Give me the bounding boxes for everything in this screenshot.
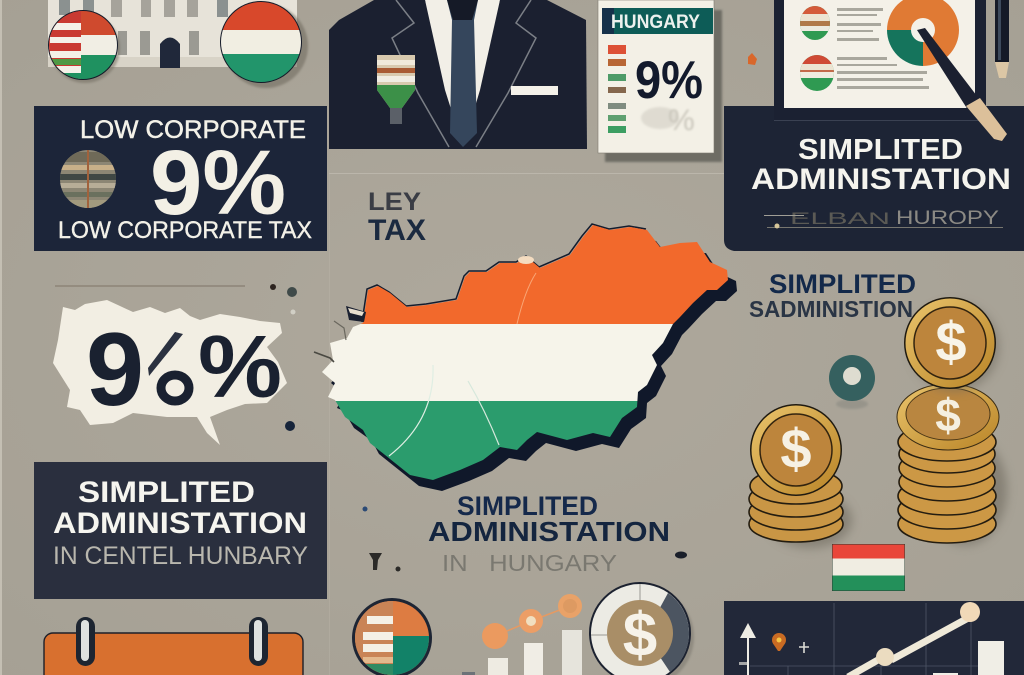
text: simplited administration in Hungary: IN HUNGARY xyxy=(442,550,617,576)
coin stack: left xyxy=(749,404,852,548)
icon: flag badge on report xyxy=(800,55,834,91)
illustration: report with donut chart and pen xyxy=(774,0,1009,141)
report text lines xyxy=(837,8,929,89)
map shadow xyxy=(331,236,737,491)
figure: percent: % xyxy=(198,317,282,416)
garbled subtitle xyxy=(764,208,1003,229)
donut chart xyxy=(887,0,959,66)
bars xyxy=(933,641,1004,675)
top coin: $ xyxy=(935,310,967,373)
label: ley tax: TAX xyxy=(368,214,426,247)
calendar ring xyxy=(76,617,95,666)
axis arrow xyxy=(739,623,756,675)
icon: striped flag badge xyxy=(48,10,120,83)
text: simplited sadministion: SIMPLITED xyxy=(769,269,916,299)
garbled subtitle: ELBAN xyxy=(790,209,890,228)
icon: faded striped badge xyxy=(60,150,116,208)
heading: simplited: SIMPLITED xyxy=(78,476,255,509)
calendar ring xyxy=(249,617,268,666)
text: simplited sadministion xyxy=(749,269,916,322)
card header xyxy=(602,8,713,34)
icon: standing pen xyxy=(995,0,1009,78)
torn paper shape xyxy=(53,300,287,445)
illustration: businessman in suit xyxy=(329,0,587,149)
caption: low corporate tax: LOW CORPORATE TAX xyxy=(58,217,312,244)
trend line xyxy=(848,602,980,675)
panel: simplified administration in central Hungary xyxy=(34,462,327,599)
icon: small orange marker xyxy=(748,53,757,65)
figure: 9: 9 xyxy=(86,312,144,428)
necktie xyxy=(447,0,478,147)
paint flecks xyxy=(270,284,297,431)
coin face: $ xyxy=(935,389,961,441)
card: Hungary 9 percent xyxy=(598,0,722,162)
paint flecks under map xyxy=(362,506,687,572)
icon: dollar gauge: $ xyxy=(623,601,657,670)
garbled subtitle: HUROPY xyxy=(896,208,999,229)
panel: growth chart xyxy=(724,601,1024,675)
pocket square xyxy=(511,86,558,95)
extra percent mark xyxy=(148,332,189,401)
icon: calendar xyxy=(44,617,303,675)
heading: administation: ADMINISTATION xyxy=(751,163,1011,196)
text: simplited administration in Hungary: SIMPLITED xyxy=(457,491,598,521)
figure: 9 percent: 9% xyxy=(635,51,703,110)
icon: plus mark xyxy=(799,642,809,653)
coin face xyxy=(897,384,999,450)
coin face: $ xyxy=(780,417,812,480)
icon: dollar gauge xyxy=(589,582,694,675)
icon: round Hungarian flag xyxy=(220,0,308,88)
bars xyxy=(462,630,582,675)
map: Hungary in flag colours xyxy=(314,220,737,491)
block: torn paper 9 percent xyxy=(53,284,297,445)
panel: low corporate tax xyxy=(34,106,327,251)
coin stack: right xyxy=(897,297,1007,545)
text: simplited administration in Hungary xyxy=(428,491,670,576)
coin face xyxy=(750,404,842,496)
faded percent mark: % xyxy=(668,104,695,137)
card header: HUNGARY xyxy=(611,12,700,33)
text: simplited sadministion: SADMINISTION xyxy=(749,296,913,322)
text: simplited administration in Hungary: ADMINISTATION xyxy=(428,516,670,547)
heading: low corporate: LOW CORPORATE xyxy=(80,116,306,144)
map edge flecks xyxy=(346,306,366,322)
illustration: parliament building with flag badges xyxy=(48,0,308,88)
icon: flag badge on report xyxy=(800,6,830,40)
faded percent mark xyxy=(641,104,695,137)
map bands xyxy=(315,220,735,486)
figure: 9 percent: 9% xyxy=(150,132,286,234)
panel: simplified administration top right xyxy=(724,106,1024,251)
icon: Hungarian flag xyxy=(832,544,905,591)
markers xyxy=(482,594,582,649)
heading: administation: ADMINISTATION xyxy=(53,507,307,540)
chart: rising bars with coins xyxy=(462,594,582,675)
heading: simplited: SIMPLITED xyxy=(798,134,963,166)
top coin xyxy=(904,297,999,391)
stripe list xyxy=(608,45,626,133)
icon: round flag badge bottom xyxy=(352,598,433,675)
icon: teal circle xyxy=(829,355,875,409)
icon: pen pointer xyxy=(917,28,1007,141)
subtitle: in central Hungary: IN CENTEL HUNBARY xyxy=(53,542,308,570)
label: ley tax: LEY xyxy=(368,188,421,216)
icon: orange pin xyxy=(772,633,786,651)
lapel pin xyxy=(377,55,415,124)
label: ley tax xyxy=(368,188,426,247)
